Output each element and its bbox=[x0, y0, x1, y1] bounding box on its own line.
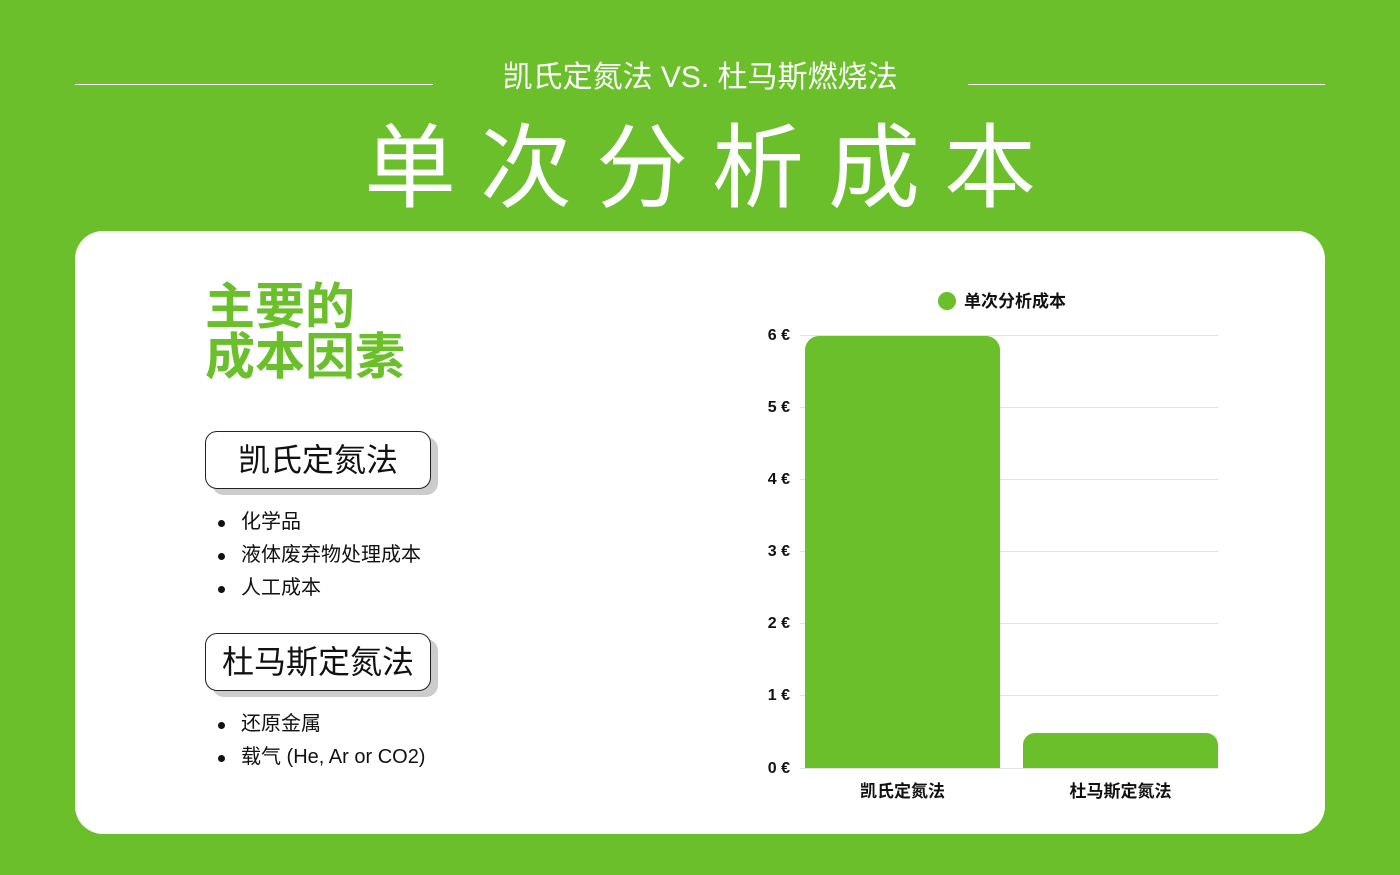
text: 1 € bbox=[768, 687, 790, 704]
list: Kjeldahl factors: 液体废弃物处理成本 bbox=[241, 544, 421, 566]
text: 3 € bbox=[768, 543, 790, 560]
bar: Kjeldahl 6€ bbox=[805, 336, 1000, 768]
list: Kjeldahl factors bbox=[218, 510, 421, 599]
list: Dumas factors: 还原金属 bbox=[241, 713, 321, 735]
text: 5 € bbox=[768, 399, 790, 416]
list: Kjeldahl factors: 化学品 bbox=[241, 511, 301, 533]
text: 6 € bbox=[768, 327, 790, 344]
text: 0 € bbox=[768, 760, 790, 777]
bar: Dumas 0.5€ bbox=[1023, 733, 1218, 768]
label box: Dumas: 杜马斯定氮法 bbox=[222, 644, 414, 680]
x labels: 凯氏定氮法 bbox=[860, 782, 945, 801]
heading: cost factors: 成本因素 bbox=[205, 329, 405, 385]
heading: cost factors: 主要的 bbox=[205, 279, 355, 335]
subtitle: 凯氏定氮法 VS. 杜马斯燃烧法 bbox=[502, 61, 898, 94]
text: 2 € bbox=[768, 615, 790, 632]
list: Dumas factors: 载气 (He, Ar or CO2) bbox=[241, 746, 425, 768]
bar chart bbox=[740, 280, 1240, 810]
heading: cost factors bbox=[205, 279, 405, 385]
legend: 单次分析成本 bbox=[964, 292, 1066, 311]
list: Kjeldahl factors: 人工成本 bbox=[241, 577, 321, 599]
label box: Kjeldahl bbox=[205, 431, 431, 489]
text: 4 € bbox=[768, 471, 790, 488]
text: 杜马斯定氮法 bbox=[1070, 782, 1172, 801]
panel: main bbox=[75, 231, 1325, 834]
list: Dumas factors bbox=[218, 712, 425, 768]
title: 单次分析成本 bbox=[364, 118, 1060, 220]
label box: Dumas bbox=[205, 633, 431, 691]
label box: Kjeldahl: 凯氏定氮法 bbox=[238, 442, 398, 478]
